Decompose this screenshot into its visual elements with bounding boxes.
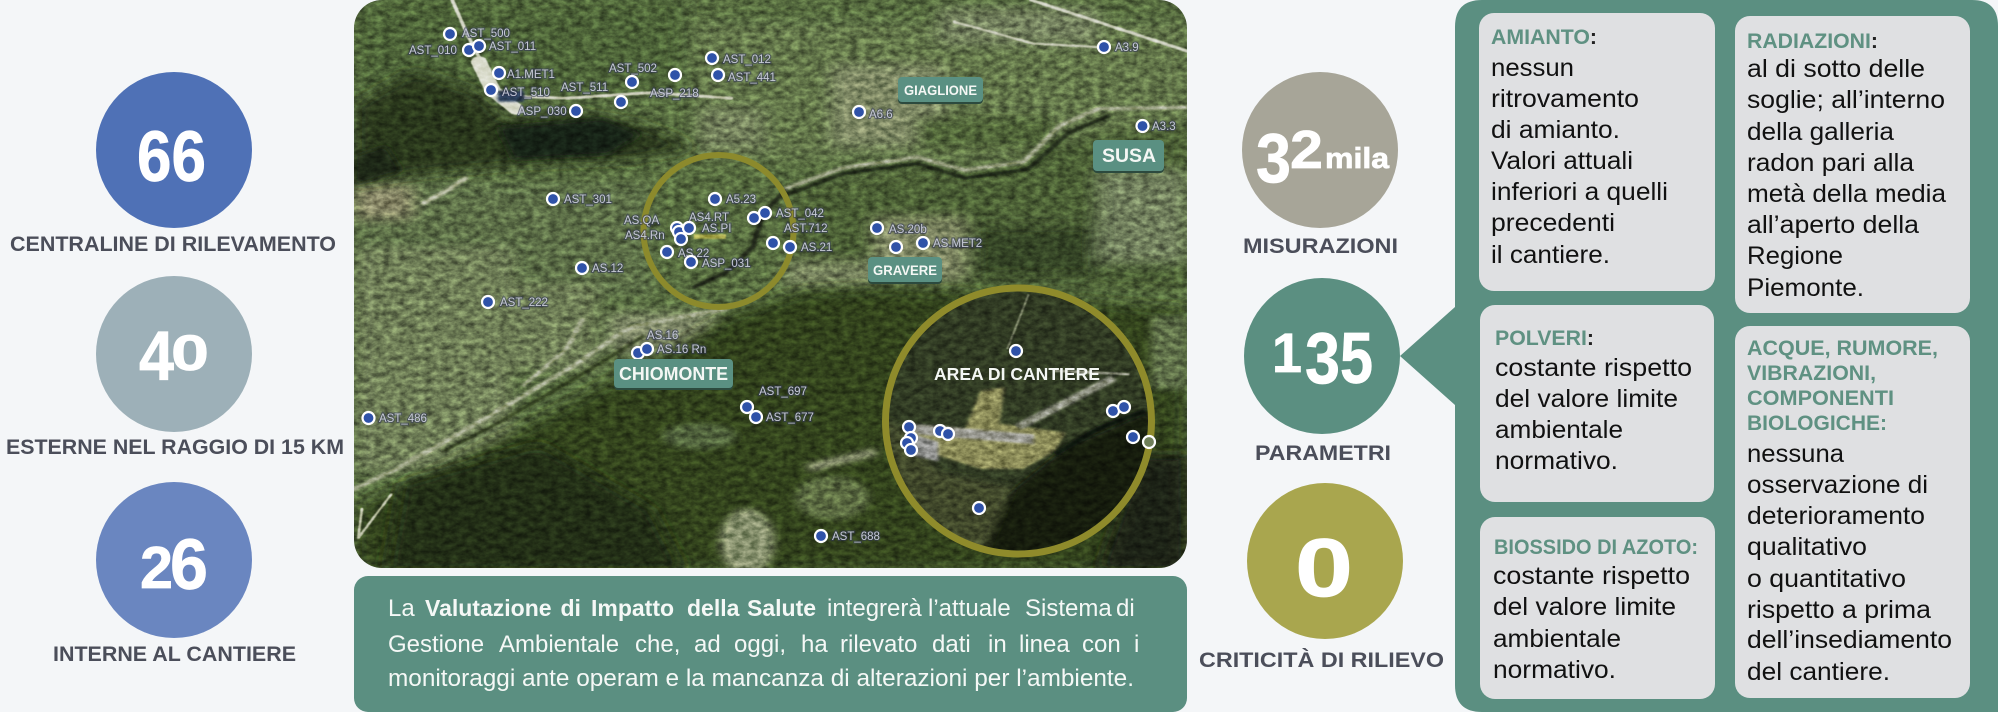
card: biossido di azoto: ambientale: [1493, 625, 1621, 653]
monitoring station labels: AST_012: [723, 54, 771, 66]
monitoring station markers: [362, 28, 1155, 542]
monitoring station labels: AST_677: [766, 412, 814, 424]
card: amianto: nessun: [1491, 54, 1574, 82]
monitoring station labels: AST_486: [379, 413, 427, 425]
description box: della: [687, 595, 740, 621]
description box: di: [560, 595, 581, 621]
card: acque, rumore, vibrazioni, componenti biologiche: nessuna: [1747, 440, 1844, 468]
monitoring station labels: AST_688: [832, 531, 880, 543]
card: amianto: inferiori a quelli: [1491, 178, 1668, 206]
description box: con: [1082, 631, 1121, 658]
monitoring station labels: A1.MET1: [507, 69, 555, 81]
place tag: chiomonte: [614, 359, 733, 390]
card: amianto: AMIANTO:: [1491, 26, 1597, 49]
monitoring station labels: AS.PI: [702, 223, 731, 235]
card: radiazioni: all’aperto della: [1747, 211, 1919, 239]
card: polveri: normativo.: [1495, 447, 1618, 475]
parameters panel with pointer: [1400, 0, 1998, 712]
place tag: susa: [1093, 140, 1164, 173]
description box: Gestione: [388, 631, 484, 658]
right stat: 0 criticità di rilievo: CRITICITÀ DI RILIEVO: [1199, 649, 1444, 672]
description box: [354, 576, 1187, 712]
map terrain: [354, 0, 1187, 574]
monitoring station labels: A3.9: [1115, 42, 1139, 54]
left stat: 40 esterne nel raggio di 15 km: ESTERNE NEL RAGGIO DI 15 KM: [6, 436, 344, 459]
satellite map panel: [354, 0, 1187, 574]
card: polveri: costante rispetto: [1495, 354, 1692, 382]
card: acque, rumore, vibrazioni, componenti biologiche: VIBRAZIONI,: [1747, 362, 1876, 385]
description box: integrerà: [827, 595, 922, 622]
monitoring station labels: AST_511: [561, 82, 608, 94]
card: acque, rumore, vibrazioni, componenti biologiche: qualitativo: [1747, 533, 1867, 561]
card: amianto: Valori attuali: [1491, 147, 1633, 175]
card: acque, rumore, vibrazioni, componenti biologiche: del cantiere.: [1747, 658, 1890, 686]
right stat: 135 parametri: PARAMETRI: [1255, 442, 1391, 465]
card: biossido di azoto: costante rispetto: [1493, 562, 1690, 590]
description box: che,: [635, 631, 680, 658]
monitoring station labels: ASP_030: [518, 106, 567, 118]
card: acque, rumore, vibrazioni, componenti biologiche: deterioramento: [1747, 502, 1925, 530]
right stat: 0 criticità di rilievo: [1199, 483, 1444, 672]
monitoring station labels: AS4.RT: [689, 212, 729, 224]
monitoring station labels: A6.6: [869, 109, 893, 121]
monitoring station labels: AST_222: [500, 297, 548, 309]
left stat: 66 centraline di rilevamento: 66: [137, 118, 206, 197]
card: acque, rumore, vibrazioni, componenti biologiche: rispetto a prima: [1747, 596, 1931, 624]
description box: Ambientale: [499, 631, 619, 658]
place tag: giaglione: GIAGLIONE: [904, 82, 977, 98]
monitoring station labels: AST_042: [776, 208, 824, 220]
description box: Salute: [747, 595, 816, 621]
description box: dati: [932, 631, 971, 658]
card: radiazioni: soglie; all’interno: [1747, 86, 1945, 114]
map texture: [354, 0, 1187, 568]
right stat: 135 parametri: [1244, 278, 1400, 465]
monitoring station labels: AS.21: [801, 242, 832, 254]
right stat: 32 mila misurazioni: [1242, 72, 1398, 258]
card: radiazioni: al di sotto delle: [1747, 55, 1925, 83]
description box: ad: [694, 631, 721, 658]
monitoring station labels: AS.22: [678, 248, 709, 260]
card: amianto: [1479, 13, 1715, 291]
card: acque, rumore, vibrazioni, componenti biologiche: [1735, 326, 1970, 698]
card: radiazioni: della galleria: [1747, 118, 1894, 146]
place tag: susa: SUSA: [1102, 146, 1156, 167]
monitoring station labels: AST_301: [564, 194, 612, 206]
left stat: 26 interne al cantiere: INTERNE AL CANTIERE: [53, 643, 296, 666]
card: acque, rumore, vibrazioni, componenti biologiche: dell’insediamento: [1747, 626, 1952, 654]
monitoring station labels: AST_510: [502, 87, 550, 99]
monitoring station labels: AST_500: [462, 28, 510, 40]
description box: Impatto: [591, 595, 674, 621]
ring: area di cantiere: [886, 288, 1152, 554]
left stat: 66 centraline di rilevamento: CENTRALINE DI RILEVAMENTO: [10, 233, 336, 256]
card: acque, rumore, vibrazioni, componenti biologiche: BIOLOGICHE:: [1747, 412, 1887, 435]
monitoring station labels: AS.20b: [889, 224, 927, 236]
right stat: 32 mila misurazioni: mila: [1325, 143, 1390, 175]
card: amianto: di amianto.: [1491, 116, 1620, 144]
description box: ha: [801, 631, 828, 658]
card: radiazioni: metà della media: [1747, 180, 1946, 208]
description box: La: [388, 595, 415, 622]
monitoring station labels: AST.712: [784, 223, 827, 235]
monitoring station labels: AS.16: [647, 330, 678, 342]
right stat: 135 parametri: 1: [1272, 321, 1302, 384]
left stat: 40 esterne nel raggio di 15 km: 0: [171, 325, 209, 381]
card: polveri: ambientale: [1495, 416, 1623, 444]
monitoring station labels: AS4.Rn: [625, 230, 665, 242]
right stat: 32 mila misurazioni: MISURAZIONI: [1243, 235, 1398, 258]
monitoring station labels: AST_011: [489, 41, 536, 53]
description box: di: [1116, 595, 1135, 622]
card: acque, rumore, vibrazioni, componenti biologiche: osservazione di: [1747, 471, 1928, 499]
monitoring station labels: AS.16 Rn: [657, 344, 706, 356]
description box: linea: [1019, 631, 1070, 658]
right stat: 135 parametri: 3: [1305, 319, 1340, 399]
description box: oggi,: [734, 631, 786, 658]
description box: Sistema: [1025, 595, 1112, 622]
monitoring station labels: A3.3: [1152, 121, 1176, 133]
monitoring station labels: ASP_031: [702, 258, 751, 270]
description box: in: [988, 631, 1007, 658]
card: polveri: POLVERI:: [1495, 327, 1594, 350]
card: acque, rumore, vibrazioni, componenti biologiche: COMPONENTI: [1747, 387, 1894, 410]
card: biossido di azoto: BIOSSIDO DI AZOTO:: [1494, 536, 1698, 559]
right stat: 32 mila misurazioni: 3: [1256, 119, 1291, 197]
left stat: 26 interne al cantiere: 2: [140, 535, 173, 601]
left stat: 26 interne al cantiere: 6: [170, 526, 208, 605]
card: amianto: il cantiere.: [1491, 241, 1610, 269]
left stat: 66 centraline di rilevamento: [10, 72, 336, 256]
card: acque, rumore, vibrazioni, componenti biologiche: o quantitativo: [1747, 565, 1906, 593]
monitoring station labels: AST_010: [409, 45, 457, 57]
card: amianto: precedenti: [1491, 209, 1615, 237]
place tag: chiomonte: CHIOMONTE: [619, 364, 728, 384]
card: biossido di azoto: [1480, 517, 1715, 699]
place tag: giaglione: [898, 77, 983, 104]
card: biossido di azoto: del valore limite: [1493, 593, 1676, 621]
card: amianto: ritrovamento: [1491, 85, 1639, 113]
description box: rilevato: [840, 631, 917, 658]
monitoring station labels: [379, 28, 1176, 543]
monitoring station labels: AS.QA: [624, 215, 659, 227]
description box: l’attuale: [928, 595, 1011, 622]
monitoring station labels: AS.MET2: [933, 238, 982, 250]
card: radiazioni: Piemonte.: [1747, 274, 1864, 302]
monitoring station labels: AST_697: [759, 386, 807, 398]
right stat: 135 parametri: 5: [1340, 319, 1373, 399]
monitoring station labels: AS.12: [592, 263, 623, 275]
monitoring station labels: ASP_218: [650, 88, 699, 100]
card: radiazioni: [1735, 16, 1970, 313]
left stat: 40 esterne nel raggio di 15 km: 4: [139, 317, 174, 395]
right stat: 0 criticità di rilievo: 0: [1295, 521, 1353, 614]
place tag: gravere: [868, 257, 942, 284]
description box: i: [1134, 631, 1139, 658]
left stat: 40 esterne nel raggio di 15 km: [6, 276, 344, 459]
left stat: 26 interne al cantiere: [53, 482, 296, 666]
card: radiazioni: radon pari alla: [1747, 149, 1914, 177]
monitoring station labels: A5.23: [726, 194, 756, 206]
monitoring station labels: AST_502: [609, 63, 657, 75]
card: biossido di azoto: normativo.: [1493, 656, 1616, 684]
right stat: 32 mila misurazioni: 2: [1290, 120, 1323, 180]
card: polveri: del valore limite: [1495, 385, 1678, 413]
monitoring station labels: AST_441: [728, 72, 776, 84]
card: polveri: [1480, 305, 1714, 502]
description box: monitoraggi ante operam e la mancanza di alterazioni per l’ambiente.: [388, 665, 1134, 692]
description box: Valutazione: [425, 595, 552, 621]
card: acque, rumore, vibrazioni, componenti biologiche: ACQUE, RUMORE,: [1747, 337, 1938, 360]
place tag: gravere: GRAVERE: [873, 262, 937, 278]
ring: inner study area: [644, 155, 794, 307]
card: radiazioni: Regione: [1747, 242, 1843, 270]
card: radiazioni: RADIAZIONI:: [1747, 30, 1878, 53]
construction area inset: [889, 292, 1148, 550]
text: area di cantiere: AREA DI CANTIERE: [934, 364, 1100, 384]
